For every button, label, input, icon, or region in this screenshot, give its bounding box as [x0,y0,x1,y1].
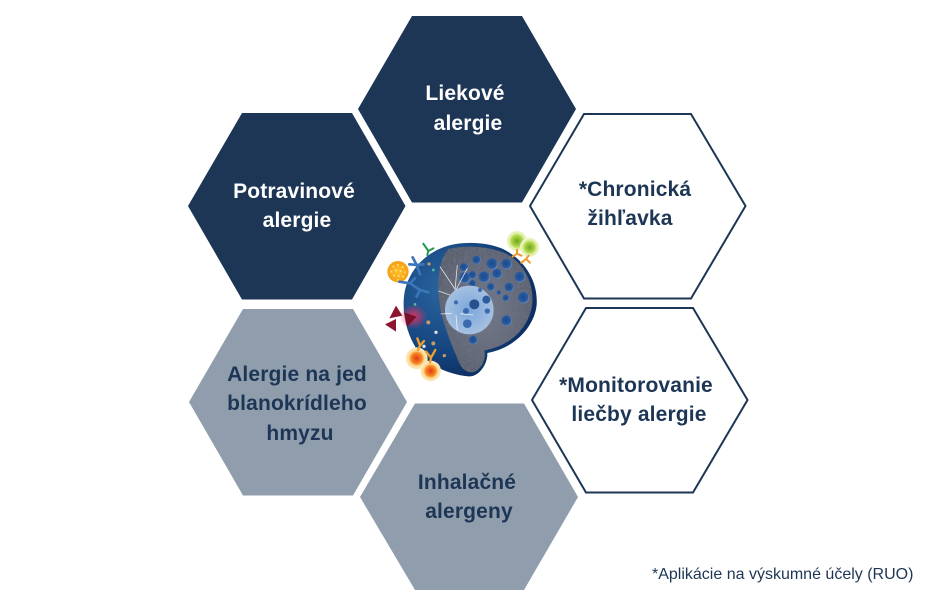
hexagon: Chronická žihľavka: *Chronická [579,178,691,201]
hexagon: Liekové alergie: alergie [434,112,502,135]
central cell illustration [385,231,539,381]
hexagon: Alergie na jed blanokrídleho hmyzu [189,309,407,496]
hexagon: Potravinové alergie [188,113,406,300]
hexagon: Inhalačné alergeny [360,404,578,590]
icon: small granules [414,262,446,357]
hexagon: Chronická žihľavka: žihľavka [587,207,673,230]
hexagon: Inhalačné alergeny: alergeny [425,500,513,523]
hexagon: Liekové alergie [358,16,576,202]
hexagon: Monitorovanie liečby alergie [532,308,748,492]
footnote: *Aplikácie na výskumné účely (RUO) [652,566,913,583]
icon: yellow pollen ball with antibodies [387,257,428,297]
hexagon: Alergie na jed blanokrídleho hmyzu: Alergie na jed [227,363,367,386]
hexagon: Potravinové alergie: alergie [263,209,331,232]
icon: gray cell interior [438,247,532,372]
icon: green cells with orange antibodies [507,231,539,263]
icon: nucleus [438,265,494,334]
icon: blue cell shell [404,243,537,376]
icon: red allergen triangles with glow [385,304,427,332]
hexagon: Potravinové alergie: Potravinové [233,180,355,203]
hexagon: Liekové alergie: Liekové [425,82,505,105]
hexagon: Alergie na jed blanokrídleho hmyzu: hmyzu [266,422,334,445]
hexagon: Alergie na jed blanokrídleho hmyzu: blanokrídleho [227,392,367,415]
hexagon: Monitorovanie liečby alergie: *Monitorovanie [559,374,713,397]
hexagon: Chronická žihľavka [530,114,746,298]
hexagon: Inhalačné alergeny: Inhalačné [418,471,516,494]
icon: red cells with orange antibodies [406,338,441,381]
hexagon: Monitorovanie liečby alergie: liečby alergie [571,403,707,426]
icon: green antibody [423,244,433,255]
